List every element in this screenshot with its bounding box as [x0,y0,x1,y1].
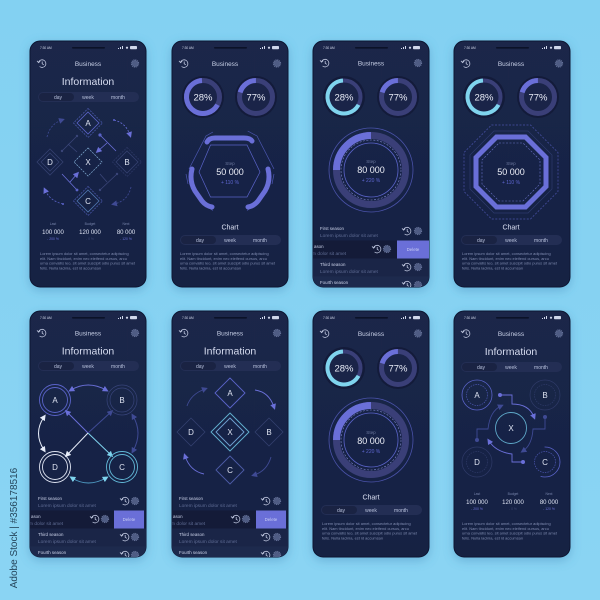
gauge text: 80 000 [357,436,385,446]
paragraph [180,251,276,270]
phone 6: diamonds with list [171,311,288,559]
header: Business [358,60,385,68]
phone 7: circular chart with tabs [313,311,429,557]
node X: X [508,424,514,433]
row 3 [172,528,288,546]
tabs [38,92,139,102]
tabs [180,235,281,245]
gauge text: Step [366,159,376,164]
stats: 80 000 [117,230,136,236]
tabs: week [365,508,377,514]
tabs: month [253,238,267,244]
stats: - 0 % [509,507,517,511]
header: Business [498,331,525,338]
tabs: month [111,364,125,370]
status bar [323,316,420,320]
row 3: Lorem ipsum dolor sit amet [320,269,379,275]
stats: Next [123,222,130,226]
phone 5: information with circles [29,311,146,559]
phone 2: hexagon chart [172,41,288,287]
tabs: month [394,508,408,514]
row 2 swiped [312,240,429,258]
paragraph: elit. Nam tincidunt, enim nec eleifend cursus, arcu [322,526,409,531]
status bar [40,46,137,50]
stats: - 120 % [120,237,132,241]
row 4: Fourth season [320,280,349,285]
donut 77%: 77% [388,364,408,374]
stats: - 200 % [47,237,59,241]
heading: Chart [221,224,239,232]
heading: Chart [502,224,520,232]
paragraph: Lorem ipsum dolor sit amet, consectetur adipiscing [180,251,269,256]
row 3: Third season [320,262,346,267]
donut 28%: 28% [334,92,354,104]
phone 4: octagon chart [454,41,570,287]
donut 77% [235,76,277,118]
tabs: day [196,364,205,370]
node A: A [474,391,480,400]
status bar: 7:30 AM [182,46,194,50]
tabs: month [253,364,267,370]
tabs: month [534,238,548,244]
donut 28% [321,74,367,120]
status bar [182,316,279,320]
list [312,226,429,289]
stats: 120 000 [502,500,524,506]
list [29,496,146,559]
row 1: Lorem ipsum dolor sit amet [179,503,238,509]
paragraph: Lorem ipsum dolor sit amet, consectetur adipiscing [462,251,551,256]
paragraph: felis. Nulla lacinia, est id accumsan [462,266,523,270]
tabs: month [111,95,125,101]
row 4: Fourth season [38,550,67,555]
phone 8: information with hub [454,311,570,557]
header: Business [212,61,239,68]
heading: Information [62,346,114,358]
list [171,496,288,559]
stats: 100 000 [466,500,488,506]
donut 77% [517,76,559,118]
row 2 swiped: ason [173,514,183,519]
node D: D [47,158,53,167]
diagram [37,108,142,216]
row 2 swiped: ason [314,244,324,249]
diamond diagram [177,378,283,484]
donut 28%: 28% [334,364,354,374]
heading: Information [485,346,537,358]
heading: Information [204,346,256,358]
tabs: week [505,365,517,371]
header [320,59,422,68]
row 1 [320,226,422,238]
tabs: day [54,364,63,370]
row 3: Third season [38,532,64,537]
paragraph [40,251,136,270]
donut 28%: 28% [474,92,494,104]
node X: X [227,428,233,437]
donut 77% [377,347,419,389]
tabs [180,361,281,371]
paragraph: felis. Nulla lacinia, est id accumsan [180,266,241,270]
paragraph: elit. Nam tincidunt, enim nec eleifend cursus, arcu [462,256,549,261]
status bar: 7:30 AM [323,46,335,50]
row 1: First season [38,496,62,501]
paragraph: urna convallis leo, sit amet suscipit odio purus sit amet [180,260,276,266]
status bar: 7:30 AM [464,46,476,50]
stats: 100 000 [42,230,64,236]
row 2 swiped: ason [31,514,41,519]
row 1 [179,496,282,508]
paragraph: urna convallis leo, sit amet suscipit odio purus sit amet [462,260,558,266]
dots [61,119,118,205]
node B: B [124,158,130,167]
tabs: day [196,238,205,244]
stats: 120 000 [79,230,102,236]
stats: - 120 % [543,507,555,511]
tabs: week [505,238,517,244]
row 1: Lorem ipsum dolor sit amet [320,233,379,239]
node A: A [227,389,233,398]
tabs: month [534,365,548,371]
gauge text: + 110 % [502,180,521,186]
tabs: day [477,365,486,371]
status bar: 7:30 AM [464,316,476,320]
donut 28% [461,74,507,120]
node B: B [119,396,125,405]
donut 28%: 28% [193,92,213,104]
row 2 swiped [29,510,144,528]
stats: Last [474,492,480,496]
paragraph [462,521,558,540]
node B: B [542,391,548,400]
tabs: week [224,364,236,370]
row 3: Lorem ipsum dolor sit amet [38,539,97,545]
node C: C [542,458,548,467]
arrows [38,385,138,483]
row 2 swiped: m dolor sit amet [312,251,347,257]
paragraph: elit. Nam tincidunt, enim nec eleifend cursus, arcu [40,256,127,261]
stats: - 200 % [471,507,483,511]
tabs: day [477,238,486,244]
connectors [45,120,131,204]
node C: C [119,463,125,472]
status bar: 7:30 AM [40,316,52,320]
paragraph: felis. Nulla lacinia, est id accumsan [40,266,101,270]
header: Business [75,330,102,338]
paragraph [462,251,558,270]
row 3 [30,528,146,546]
row 1: First season [179,496,203,501]
stats [42,222,136,241]
tabs: week [82,95,94,101]
paragraph: elit. Nam tincidunt, enim nec eleifend cursus, arcu [462,526,549,531]
stats: - 0 % [86,237,94,241]
row 2 swiped [171,510,286,528]
stats: Next [546,492,553,496]
status bar [40,316,137,320]
octagon gauge [464,125,558,219]
status bar [464,46,561,50]
tabs: week [82,364,94,370]
gauge text [216,161,244,186]
tabs [461,362,562,372]
tabs: week [224,238,236,244]
paragraph: urna convallis leo, sit amet suscipit odio purus sit amet [462,530,558,536]
hub diagram [462,380,560,477]
stats: Last [50,222,56,226]
gauge text [357,159,385,184]
row 3 [313,258,429,276]
row 1: Lorem ipsum dolor sit amet [38,503,97,509]
phone 1: information with diamonds [30,41,146,287]
gauge text: + 220 % [362,449,381,455]
donut 77%: 77% [528,92,548,104]
row 1 [38,496,140,508]
gauge text [357,430,385,455]
donut 28% [321,345,367,391]
gauge text: + 220 % [362,178,381,184]
tabs: day [54,95,63,101]
donut 28% [180,74,226,120]
stats [466,492,559,511]
donut 77%: 77% [246,92,266,104]
status bar: 7:30 AM [323,316,335,320]
connectors [477,395,545,462]
row 2 swiped: m dolor sit amet [171,521,206,527]
row 2 swiped: Delete [265,517,278,522]
paragraph: urna convallis leo, sit amet suscipit odio purus sit amet [40,260,136,266]
node C: C [85,197,91,206]
status bar [323,46,420,50]
header [461,60,563,68]
gauge text [497,161,525,186]
header [179,329,281,338]
network diagram [38,384,138,483]
paragraph: elit. Nam tincidunt, enim nec eleifend cursus, arcu [180,256,267,261]
gauge text: 50 000 [497,167,525,177]
row 2 swiped: m dolor sit amet [29,521,64,527]
row 2 swiped: Delete [407,247,420,252]
header: Business [358,331,385,338]
paragraph [322,521,418,540]
paragraph: urna convallis leo, sit amet suscipit odio purus sit amet [322,530,418,536]
node C: C [227,466,233,475]
header: Business [498,61,525,68]
row 3: Third season [179,532,205,537]
header [37,329,139,338]
row 1: First season [320,226,344,231]
row 2 swiped: Delete [123,517,136,522]
hexagon gauge [186,131,274,210]
gauge text: Step [366,430,376,435]
tabs [321,505,422,515]
gauge text: 50 000 [216,167,244,177]
ring gauge [329,398,413,482]
phone 3: circular chart with list [312,41,429,289]
paragraph: Lorem ipsum dolor sit amet, consectetur adipiscing [462,521,551,526]
status bar [182,46,279,50]
heading: Chart [362,494,380,502]
paragraph: felis. Nulla lacinia, est id accumsan [322,536,383,540]
header [461,330,563,338]
status bar: 7:30 AM [182,316,194,320]
stock credit: Adobe Stock | #356178516 [9,467,20,588]
dots [475,393,547,464]
gauge text: Step [225,161,235,166]
tabs [461,235,562,245]
stats: Budget [508,492,518,496]
status bar: 7:30 AM [40,46,52,50]
stats: Budget [85,222,95,226]
node D: D [52,463,58,472]
row 4: Fourth season [179,550,208,555]
status bar [464,316,561,320]
ring gauge [329,128,413,212]
node D: D [474,458,480,467]
arrows [185,389,274,475]
node A: A [85,119,91,128]
header [320,330,422,338]
donut 77% [377,76,419,118]
paragraph: Lorem ipsum dolor sit amet, consectetur adipiscing [40,251,129,256]
paragraph: felis. Nulla lacinia, est id accumsan [462,536,523,540]
row 3: Lorem ipsum dolor sit amet [179,539,238,545]
header [179,60,281,68]
tabs: day [337,508,346,514]
donut 77%: 77% [388,92,408,104]
node B: B [266,428,272,437]
stats: 80 000 [540,500,559,506]
tabs [38,361,139,371]
gauge text: + 110 % [221,180,240,186]
gauge text: 80 000 [357,165,385,175]
header [37,60,139,68]
node A: A [52,396,58,405]
node D: D [188,428,194,437]
header: Business [75,61,102,68]
heading: Information [62,76,114,88]
paragraph: Lorem ipsum dolor sit amet, consectetur adipiscing [322,521,411,526]
header: Business [217,330,244,338]
gauge text: Step [506,161,516,166]
node X: X [85,158,91,167]
